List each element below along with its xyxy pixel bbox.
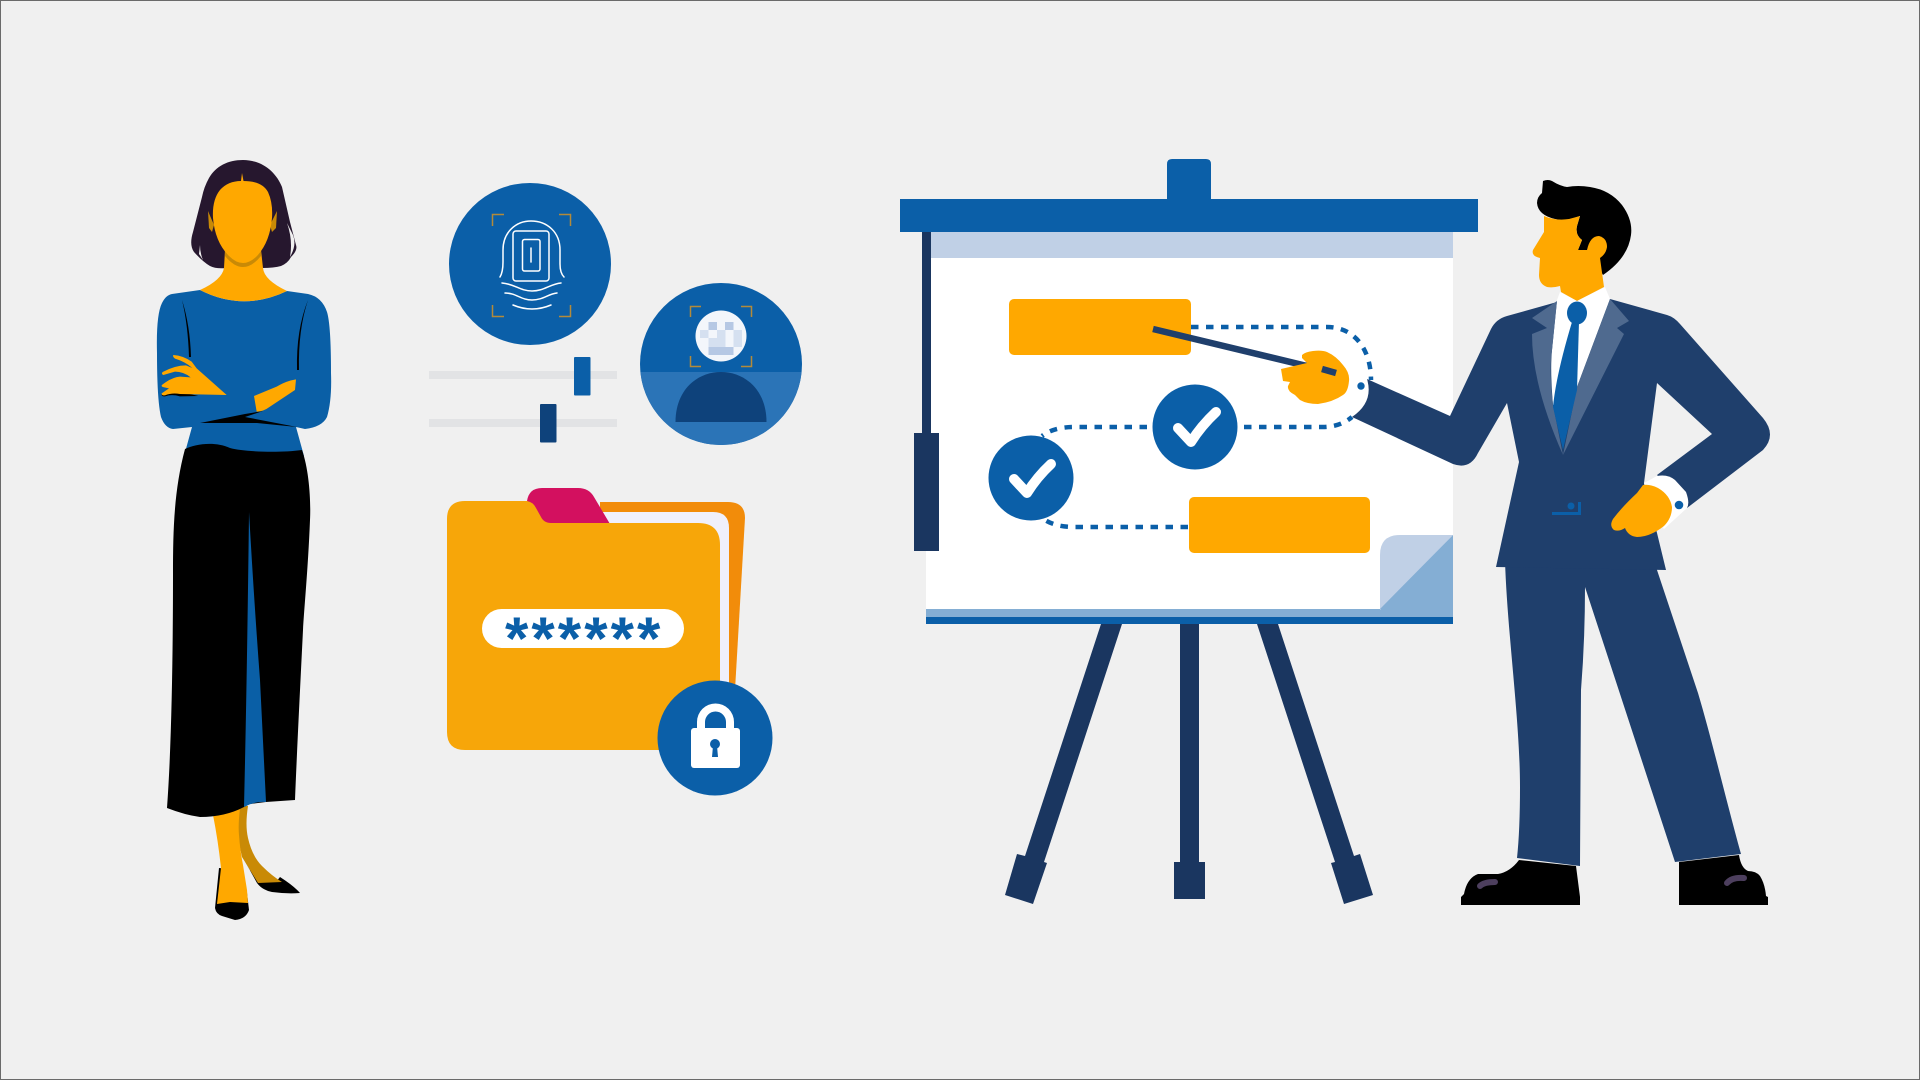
fingerprint scan brackets <box>492 214 570 316</box>
board bottom strip <box>926 609 1453 617</box>
face scan brackets <box>690 306 752 366</box>
man: ear <box>1587 236 1607 262</box>
man: cuff button on pointing arm <box>1357 382 1365 390</box>
board white sheet <box>926 232 1453 610</box>
fingerprint scan icon <box>449 183 611 345</box>
man: face and neck <box>1533 216 1604 301</box>
woman: left hand <box>162 355 227 396</box>
page curl corner <box>1380 535 1453 610</box>
board bottom line <box>926 617 1453 624</box>
woman: back leg and shoe <box>236 806 300 893</box>
slider track 2 <box>429 419 617 427</box>
man: shirt collar <box>1551 287 1610 405</box>
woman: front leg and shoe <box>213 808 249 920</box>
checkmark circle right <box>1152 384 1238 470</box>
password field: ****** <box>505 605 661 672</box>
pointer grip tip <box>1322 369 1336 373</box>
top orange box <box>1009 299 1191 355</box>
woman: right hand <box>254 379 296 412</box>
man: right lapel <box>1563 299 1629 455</box>
man: trousers <box>1505 555 1741 866</box>
padlock badge <box>658 680 772 796</box>
folder front <box>447 501 720 750</box>
folder pink tab <box>527 488 610 524</box>
slider controls <box>429 357 617 442</box>
person shoulders <box>676 372 766 422</box>
pixelated face <box>696 310 746 362</box>
man: jacket <box>1352 299 1770 570</box>
man: right shoe <box>1679 855 1768 905</box>
woman with crossed arms <box>157 160 331 920</box>
dashed flow connectors <box>1042 327 1371 527</box>
face recognition icon <box>640 283 802 445</box>
board top tab <box>1167 159 1211 200</box>
pointer stick <box>1153 329 1336 373</box>
woman: hair <box>191 160 296 268</box>
man in suit presenting <box>1153 180 1770 905</box>
presentation board <box>900 159 1478 904</box>
woman: ears <box>208 211 277 232</box>
fingerprint lines <box>500 221 564 309</box>
man: hand on hip <box>1611 485 1672 537</box>
man: tie <box>1553 302 1587 450</box>
board top bar <box>900 199 1478 232</box>
woman: sleeve folds <box>182 300 308 427</box>
man: hair <box>1537 180 1631 275</box>
slider handle 1 <box>574 357 590 396</box>
slider track 1 <box>429 371 617 379</box>
woman: sweater <box>157 290 331 456</box>
folder back cover <box>600 502 745 690</box>
man: jacket pocket <box>1552 502 1581 515</box>
man: left lapel <box>1532 301 1563 455</box>
man: left shoe <box>1461 860 1580 905</box>
man: shirt cuff on hip hand <box>1644 476 1688 529</box>
man: pointing hand <box>1281 351 1349 404</box>
lighter lower half <box>640 372 802 445</box>
password folder <box>447 488 772 796</box>
slider handle 2 <box>540 404 556 442</box>
folder paper sheet <box>600 512 729 690</box>
board header band <box>931 232 1453 258</box>
board tripod legs <box>1005 624 1373 904</box>
woman: skirt <box>167 444 310 817</box>
woman: chin shadow <box>225 250 261 267</box>
bottom orange box <box>1189 497 1370 553</box>
man: cuff button <box>1675 501 1683 509</box>
woman: face <box>213 173 272 263</box>
woman: neck <box>200 250 287 301</box>
board left post <box>914 232 939 551</box>
checkmark circle left <box>988 436 1074 520</box>
